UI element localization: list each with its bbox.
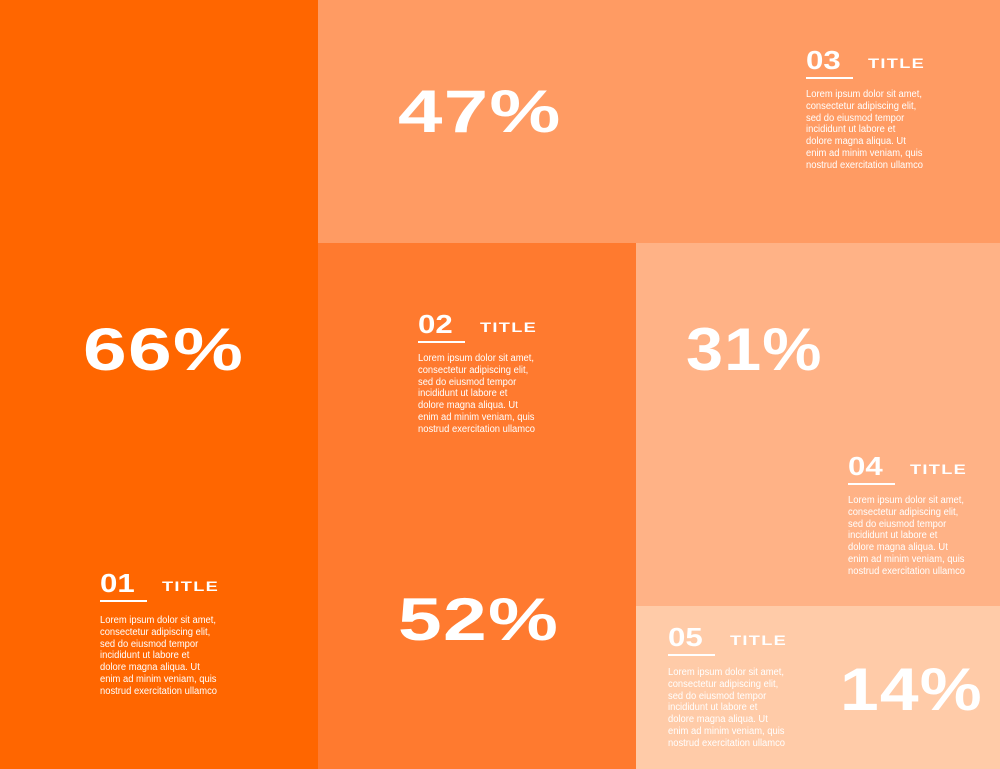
stat 66%: 66% — [83, 316, 244, 383]
text 04: nostrud exercitation ullamco — [848, 566, 965, 577]
text 03: incididunt ut labore et — [806, 124, 895, 135]
heading 01: 01 — [100, 568, 135, 598]
text 02: dolore magna aliqua. Ut — [418, 400, 518, 411]
text 05: incididunt ut labore et — [668, 702, 757, 713]
text 02 — [418, 353, 535, 435]
text 03: enim ad minim veniam, quis — [806, 148, 923, 159]
text 04 — [848, 495, 965, 577]
text 02: nostrud exercitation ullamco — [418, 424, 535, 435]
text 03: sed do eiusmod tempor — [806, 113, 904, 124]
stat 52%: 52% — [398, 586, 559, 653]
text 02: incididunt ut labore et — [418, 388, 507, 399]
heading 04 — [848, 451, 967, 485]
text 01: sed do eiusmod tempor — [100, 639, 198, 650]
text 03: dolore magna aliqua. Ut — [806, 136, 906, 147]
text 04: sed do eiusmod tempor — [848, 519, 946, 530]
heading 03: 03 — [806, 45, 841, 75]
heading 03: TITLE — [868, 55, 925, 71]
text 04: Lorem ipsum dolor sit amet, — [848, 495, 964, 506]
text 03: Lorem ipsum dolor sit amet, — [806, 89, 922, 100]
text 01: incididunt ut labore et — [100, 650, 189, 661]
text 01: enim ad minim veniam, quis — [100, 674, 217, 685]
panel: 05 — [636, 606, 1000, 769]
panel: 02 — [318, 243, 636, 769]
heading 05 — [668, 622, 787, 656]
heading 03 — [806, 45, 925, 79]
text 01 — [100, 615, 217, 697]
text 05: dolore magna aliqua. Ut — [668, 714, 768, 725]
text 02: consectetur adipiscing elit, — [418, 365, 528, 376]
text 04: consectetur adipiscing elit, — [848, 507, 958, 518]
text 04: dolore magna aliqua. Ut — [848, 542, 948, 553]
text 03: nostrud exercitation ullamco — [806, 160, 923, 171]
text 02: sed do eiusmod tempor — [418, 377, 516, 388]
text 03: consectetur adipiscing elit, — [806, 101, 916, 112]
text 05 — [668, 667, 785, 749]
text 03 — [806, 89, 923, 171]
text 01: nostrud exercitation ullamco — [100, 686, 217, 697]
text 02: Lorem ipsum dolor sit amet, — [418, 353, 534, 364]
text 02: enim ad minim veniam, quis — [418, 412, 535, 423]
heading 04: 04 — [848, 451, 883, 481]
stat 31%: 31% — [686, 316, 823, 383]
panel: 04 — [636, 243, 1000, 606]
heading 04: TITLE — [910, 461, 967, 477]
heading 02: 02 — [418, 309, 453, 339]
stat 47%: 47% — [398, 78, 562, 145]
text 05: sed do eiusmod tempor — [668, 691, 766, 702]
stat 14%: 14% — [840, 656, 983, 723]
text 05: enim ad minim veniam, quis — [668, 726, 785, 737]
text 05: consectetur adipiscing elit, — [668, 679, 778, 690]
text 01: dolore magna aliqua. Ut — [100, 662, 200, 673]
text 01: consectetur adipiscing elit, — [100, 627, 210, 638]
heading 01 — [100, 568, 219, 602]
heading 02: TITLE — [480, 319, 537, 335]
text 05: nostrud exercitation ullamco — [668, 738, 785, 749]
text 04: enim ad minim veniam, quis — [848, 554, 965, 565]
heading 05: TITLE — [730, 632, 787, 648]
heading 01: TITLE — [162, 578, 219, 594]
heading 05: 05 — [668, 622, 703, 652]
panel: 03 — [318, 0, 1000, 243]
text 01: Lorem ipsum dolor sit amet, — [100, 615, 216, 626]
text 05: Lorem ipsum dolor sit amet, — [668, 667, 784, 678]
panel: 01 — [0, 0, 318, 769]
text 04: incididunt ut labore et — [848, 530, 937, 541]
heading 02 — [418, 309, 537, 343]
